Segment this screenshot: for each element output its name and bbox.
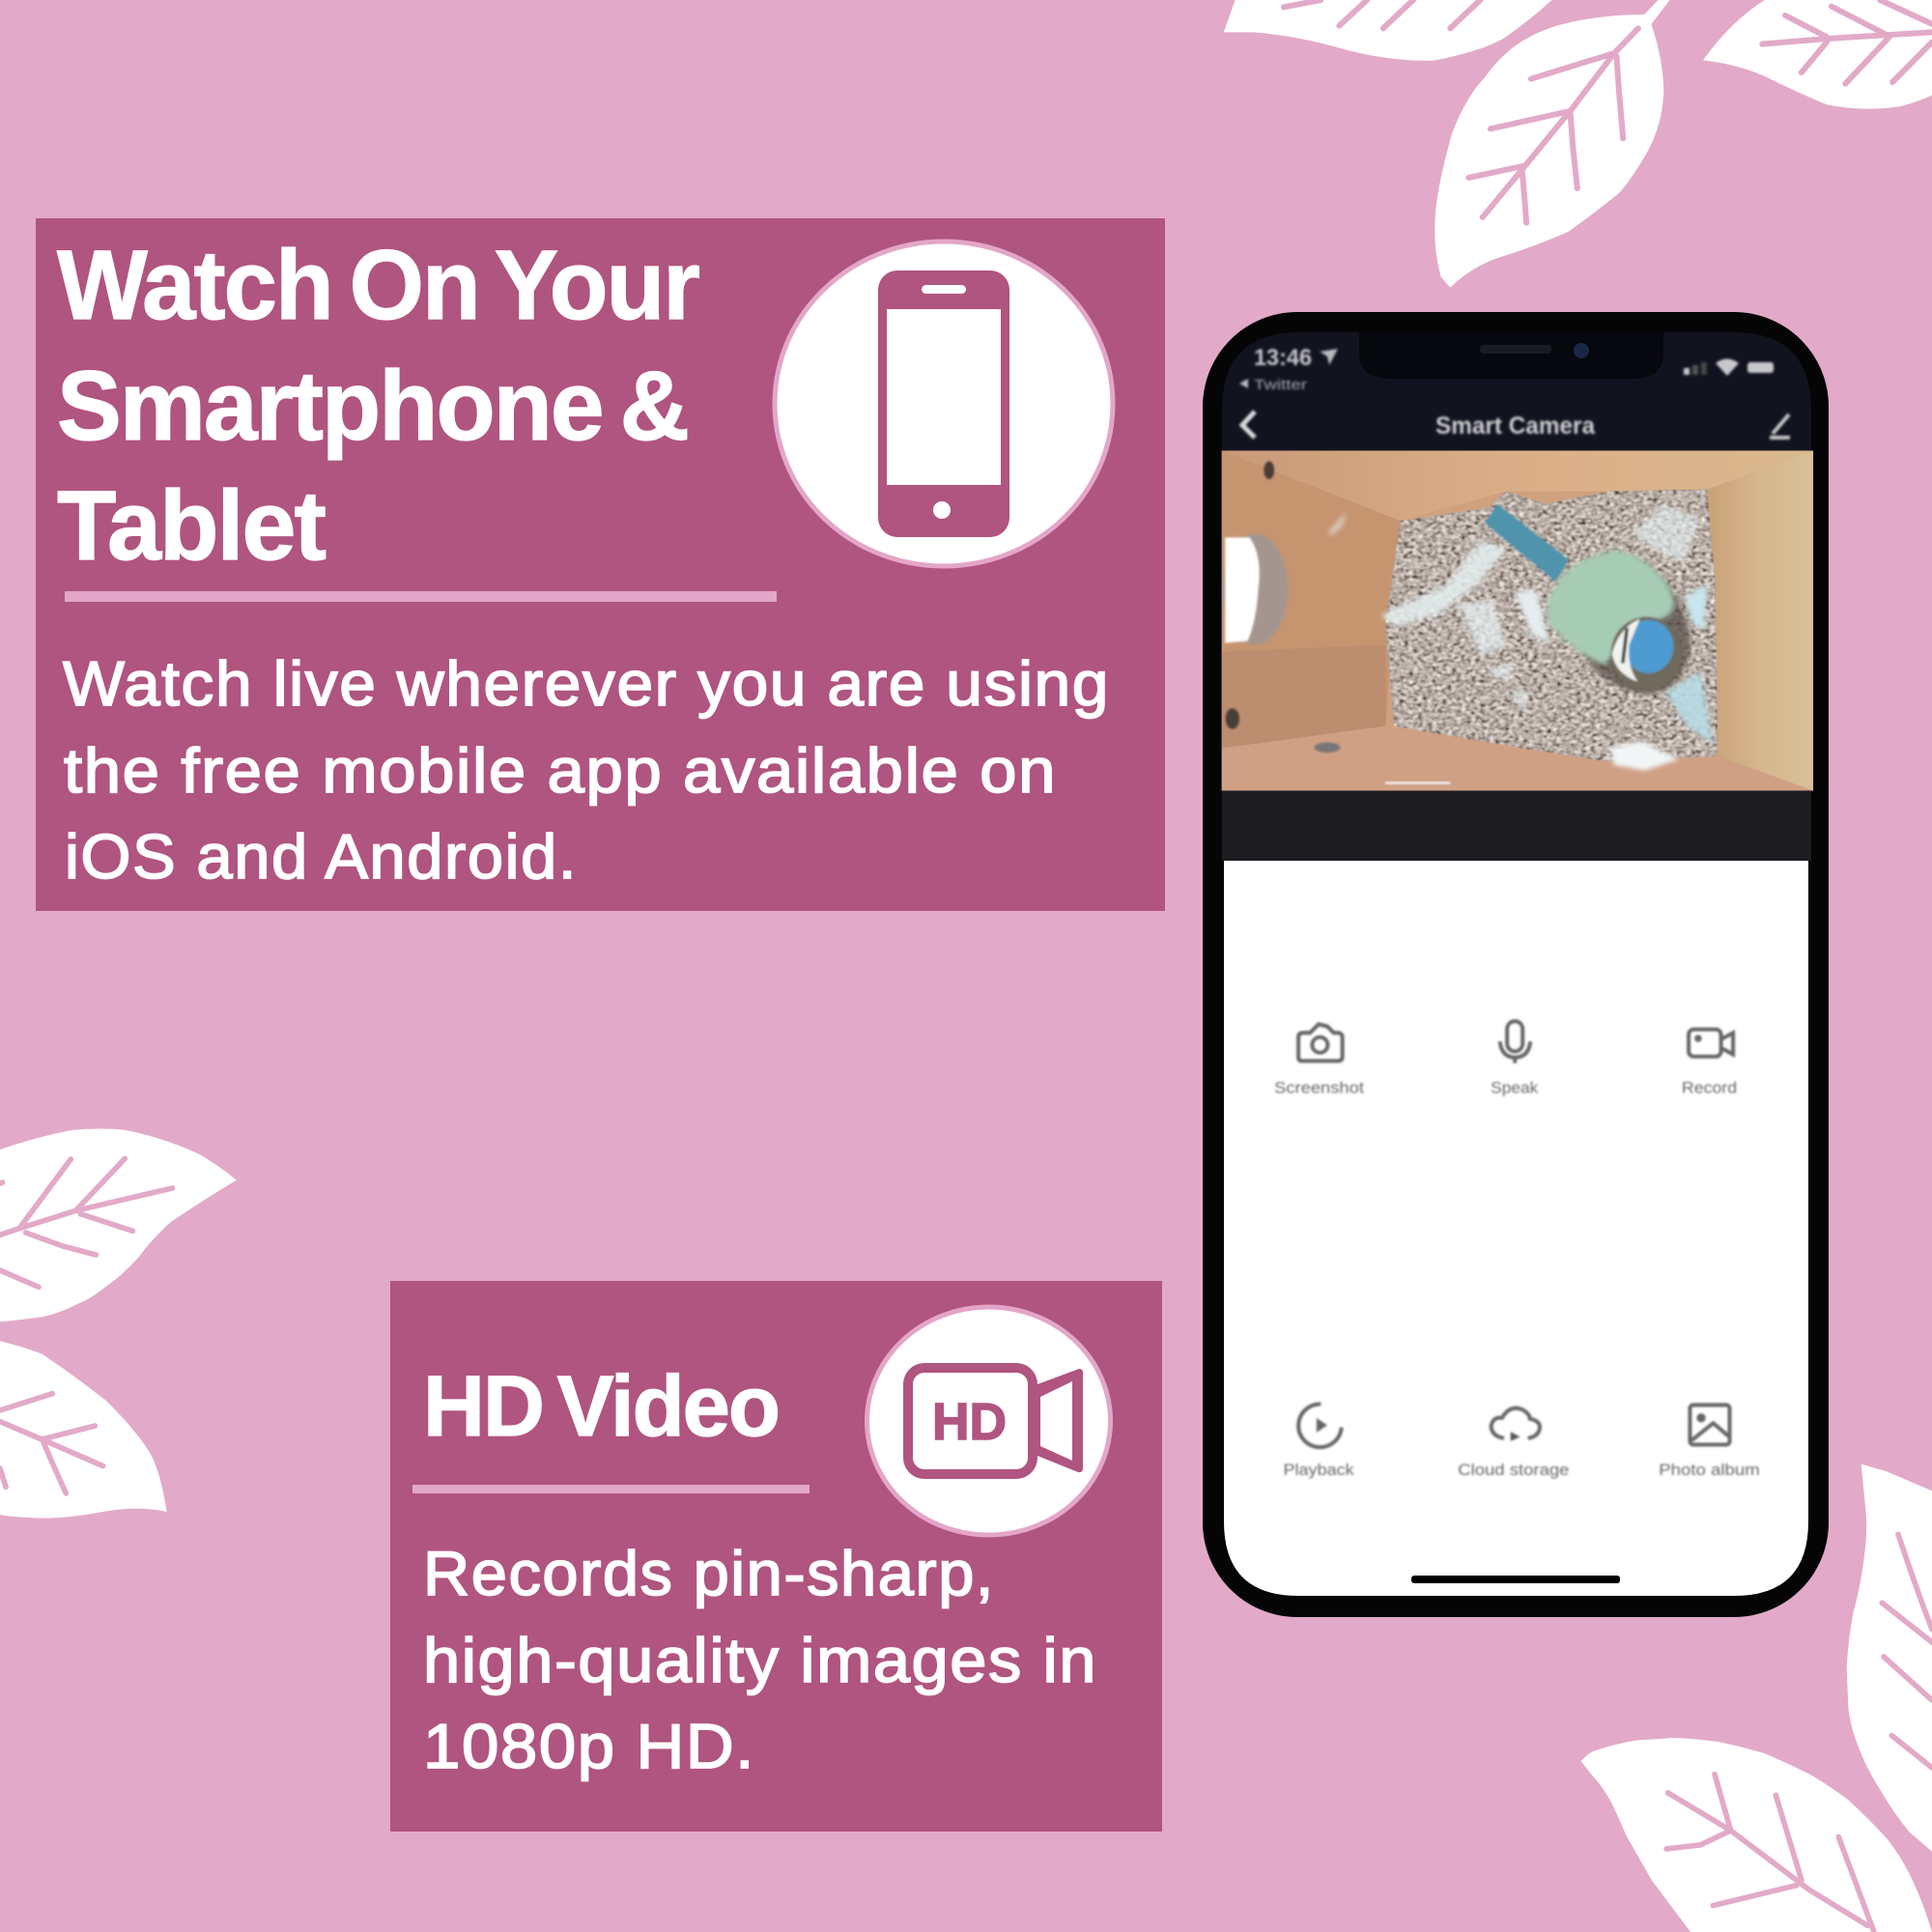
control: record bbox=[1682, 1030, 1737, 1097]
control: playback bbox=[1283, 1405, 1354, 1479]
control bar bbox=[1222, 791, 1811, 861]
control: photo album: Photo album bbox=[1659, 1461, 1760, 1479]
home indicator bbox=[1411, 1576, 1620, 1583]
panel: hd video bbox=[390, 1281, 1162, 1832]
leaves: left cluster bbox=[0, 1128, 237, 1519]
leaf: bottom bbox=[1581, 1738, 1932, 1932]
icon: hd video camera in circle bbox=[867, 1307, 1111, 1535]
status bar: 13:46 bbox=[1254, 345, 1312, 371]
control: screenshot bbox=[1274, 1024, 1364, 1097]
bird tail bbox=[1485, 504, 1569, 582]
body text: watch live: the free mobile app available on bbox=[64, 735, 1057, 806]
body text: records: 1080p HD. bbox=[423, 1711, 755, 1781]
phone top bar bbox=[1222, 332, 1811, 861]
phone notch bbox=[1359, 332, 1663, 379]
camera view: blue tit in nest box bbox=[1222, 450, 1813, 791]
bird cup shadow bbox=[1579, 568, 1693, 696]
control: speak bbox=[1491, 1021, 1539, 1097]
bird head bbox=[1611, 617, 1682, 691]
control: speak: Speak bbox=[1491, 1079, 1539, 1097]
panel: watch on your smartphone bbox=[36, 218, 1165, 911]
white control area bbox=[1224, 861, 1808, 1596]
leaves: top right cluster bbox=[1224, 0, 1932, 288]
icon: smartphone in circle bbox=[775, 242, 1113, 566]
leaf: top centre bbox=[1435, 0, 1669, 288]
app controls bbox=[1274, 1021, 1760, 1479]
body text: records bbox=[423, 1538, 1097, 1781]
body text: watch live: iOS and Android. bbox=[65, 821, 578, 892]
heading: hd video: HD Video bbox=[423, 1357, 779, 1454]
divider rule bbox=[412, 1485, 810, 1493]
heading: watch on your smartphone and tablet bbox=[57, 230, 699, 581]
nav bar: back arrow, title, edit bbox=[1242, 412, 1790, 440]
heading: watch on your smartphone and tablet: Smartphone & bbox=[57, 351, 688, 461]
status bar: Twitter bbox=[1254, 377, 1307, 393]
nav bar: back arrow, title, edit: Smart Camera bbox=[1435, 412, 1596, 440]
leaf: left lower bbox=[0, 1341, 167, 1519]
icon: hd video camera in circle: HD bbox=[932, 1393, 1007, 1451]
leaves: bottom right cluster bbox=[1581, 1464, 1932, 1932]
bird body bbox=[1548, 551, 1674, 665]
pale strip at bottom of picture bbox=[1385, 781, 1450, 784]
notch speaker and camera bbox=[1480, 343, 1589, 358]
control: cloud storage: Cloud storage bbox=[1458, 1461, 1569, 1479]
control: record: Record bbox=[1682, 1079, 1737, 1097]
divider rule bbox=[65, 591, 777, 602]
status bar bbox=[1239, 345, 1774, 393]
phone mockup bbox=[1203, 312, 1829, 1617]
body text: records: Records pin-sharp, bbox=[423, 1538, 995, 1608]
control: screenshot: Screenshot bbox=[1274, 1079, 1364, 1097]
control: playback: Playback bbox=[1283, 1461, 1354, 1479]
phone frame bbox=[1203, 312, 1829, 1617]
small dark marks on wood bbox=[1226, 462, 1340, 753]
nest bbox=[1385, 490, 1718, 761]
body text: records: high-quality images in bbox=[423, 1625, 1097, 1695]
leaf: top left bbox=[1224, 0, 1551, 61]
nest box entrance hole bbox=[1223, 534, 1288, 644]
leaf: top right bbox=[1703, 0, 1932, 109]
feathers bbox=[1329, 504, 1714, 771]
wood walls bbox=[1222, 450, 1813, 791]
leaf: left upper bbox=[0, 1128, 237, 1321]
leaf: right edge bbox=[1847, 1464, 1932, 1852]
body text: watch live: Watch live wherever you are using bbox=[63, 648, 1110, 719]
body text: watch live bbox=[63, 648, 1110, 892]
heading: watch on your smartphone and tablet: Watch On Your bbox=[57, 230, 699, 340]
heading: watch on your smartphone and tablet: Tablet bbox=[57, 470, 326, 581]
control: photo album bbox=[1659, 1405, 1760, 1479]
control: cloud storage bbox=[1458, 1408, 1569, 1479]
